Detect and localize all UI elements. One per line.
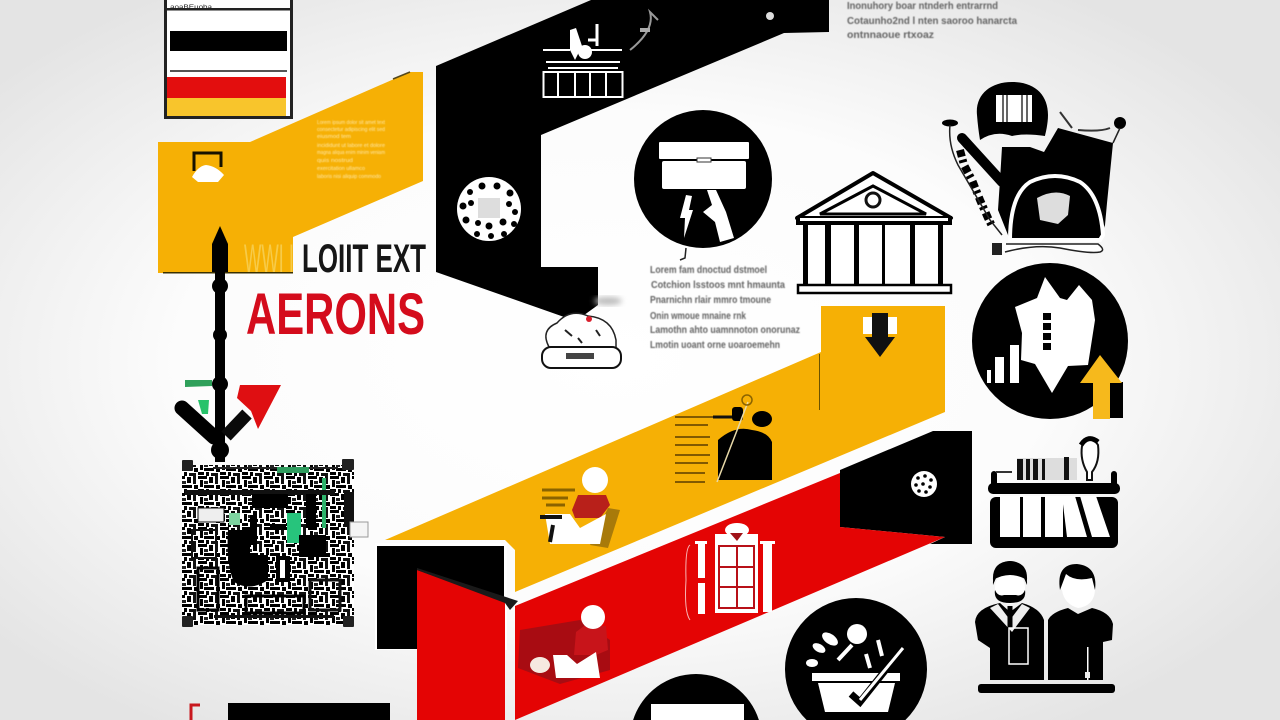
icon: person with envelope <box>518 605 610 684</box>
circle icon: map and growth arrow <box>972 263 1128 419</box>
ribbon caption: Lorem ipsum dolor sit amet text <box>317 120 386 126</box>
flag panel <box>164 0 293 119</box>
circle icon: basket with check <box>785 598 927 720</box>
red lower ribbon <box>515 473 945 720</box>
text block: body copy: Cotchion lsstoos mnt hmaunta <box>651 280 785 291</box>
icon: speech bubble and watering can <box>942 82 1126 255</box>
ribbon caption: exercitation ullamco <box>317 166 365 172</box>
ribbon caption: laboris nisi aliquip commodo <box>317 174 381 180</box>
arrow pole with branches <box>182 226 281 462</box>
circle icon: bottom partial <box>633 674 759 720</box>
icon: ribbon frame <box>192 153 224 182</box>
icon: dotted cluster <box>457 177 521 241</box>
ribbon caption: quis nostrud <box>317 158 353 164</box>
text block: body copy: Onin wmoue mnaine rnk <box>650 311 746 322</box>
heading: WWI I <box>244 237 294 281</box>
heading: LOIIT EXT <box>302 237 426 281</box>
icon: list and figure <box>675 395 772 482</box>
text block: body copy: Lmotin uoant orne uoaroemehn <box>650 340 780 351</box>
icon: cabinet <box>686 523 775 620</box>
icon: temple <box>796 173 952 293</box>
heading <box>244 237 426 347</box>
yellow top ribbon <box>158 72 423 274</box>
circle icon: box and hands <box>634 110 772 260</box>
heading: AERONS <box>246 282 425 347</box>
icon: two people <box>975 561 1115 693</box>
black corner panel with dot ball <box>840 431 972 544</box>
text block: body copy: Lorem fam dnoctud dstmoel <box>650 265 767 276</box>
icon: down arrow <box>863 313 897 357</box>
yellow lower ribbon <box>385 306 945 592</box>
text block: top right copy: Cotaunho2nd l nten saoroo hanarcta <box>847 16 1017 27</box>
bottom black bar <box>191 703 390 720</box>
ribbon caption: consectetur adipiscing elit sed <box>317 127 385 133</box>
icon: dot ball <box>911 471 937 497</box>
icon: building with people <box>543 12 774 97</box>
text block: top right copy: ontnnaoue rtxoaz <box>847 30 934 41</box>
text block: body copy: Pnarnichn rlair mmro tmoune <box>650 295 771 306</box>
flag panel: aoaBEuoba <box>170 5 213 11</box>
ribbon caption: magna aliqua enim minim veniam <box>317 150 385 156</box>
text block: top right copy: Inonuhory boar ntnderh entrarrnd <box>847 1 998 12</box>
black top ribbon <box>436 0 829 318</box>
icon: worker with envelope <box>540 467 620 548</box>
red fold <box>417 568 518 720</box>
ribbon caption <box>317 120 386 180</box>
ribbon caption: eiusmod tem <box>317 134 351 140</box>
icon: shelf and books <box>988 439 1120 548</box>
text block: top right copy <box>847 1 1017 41</box>
icon: food bowl <box>542 297 622 368</box>
ribbon caption: incididunt ut labore et dolore <box>317 143 385 149</box>
text block: body copy <box>650 265 800 351</box>
black square behind red <box>375 543 507 650</box>
text block: body copy: Lamothn ahto uamnnoton onorunaz <box>650 325 800 336</box>
circuit map <box>182 459 368 627</box>
